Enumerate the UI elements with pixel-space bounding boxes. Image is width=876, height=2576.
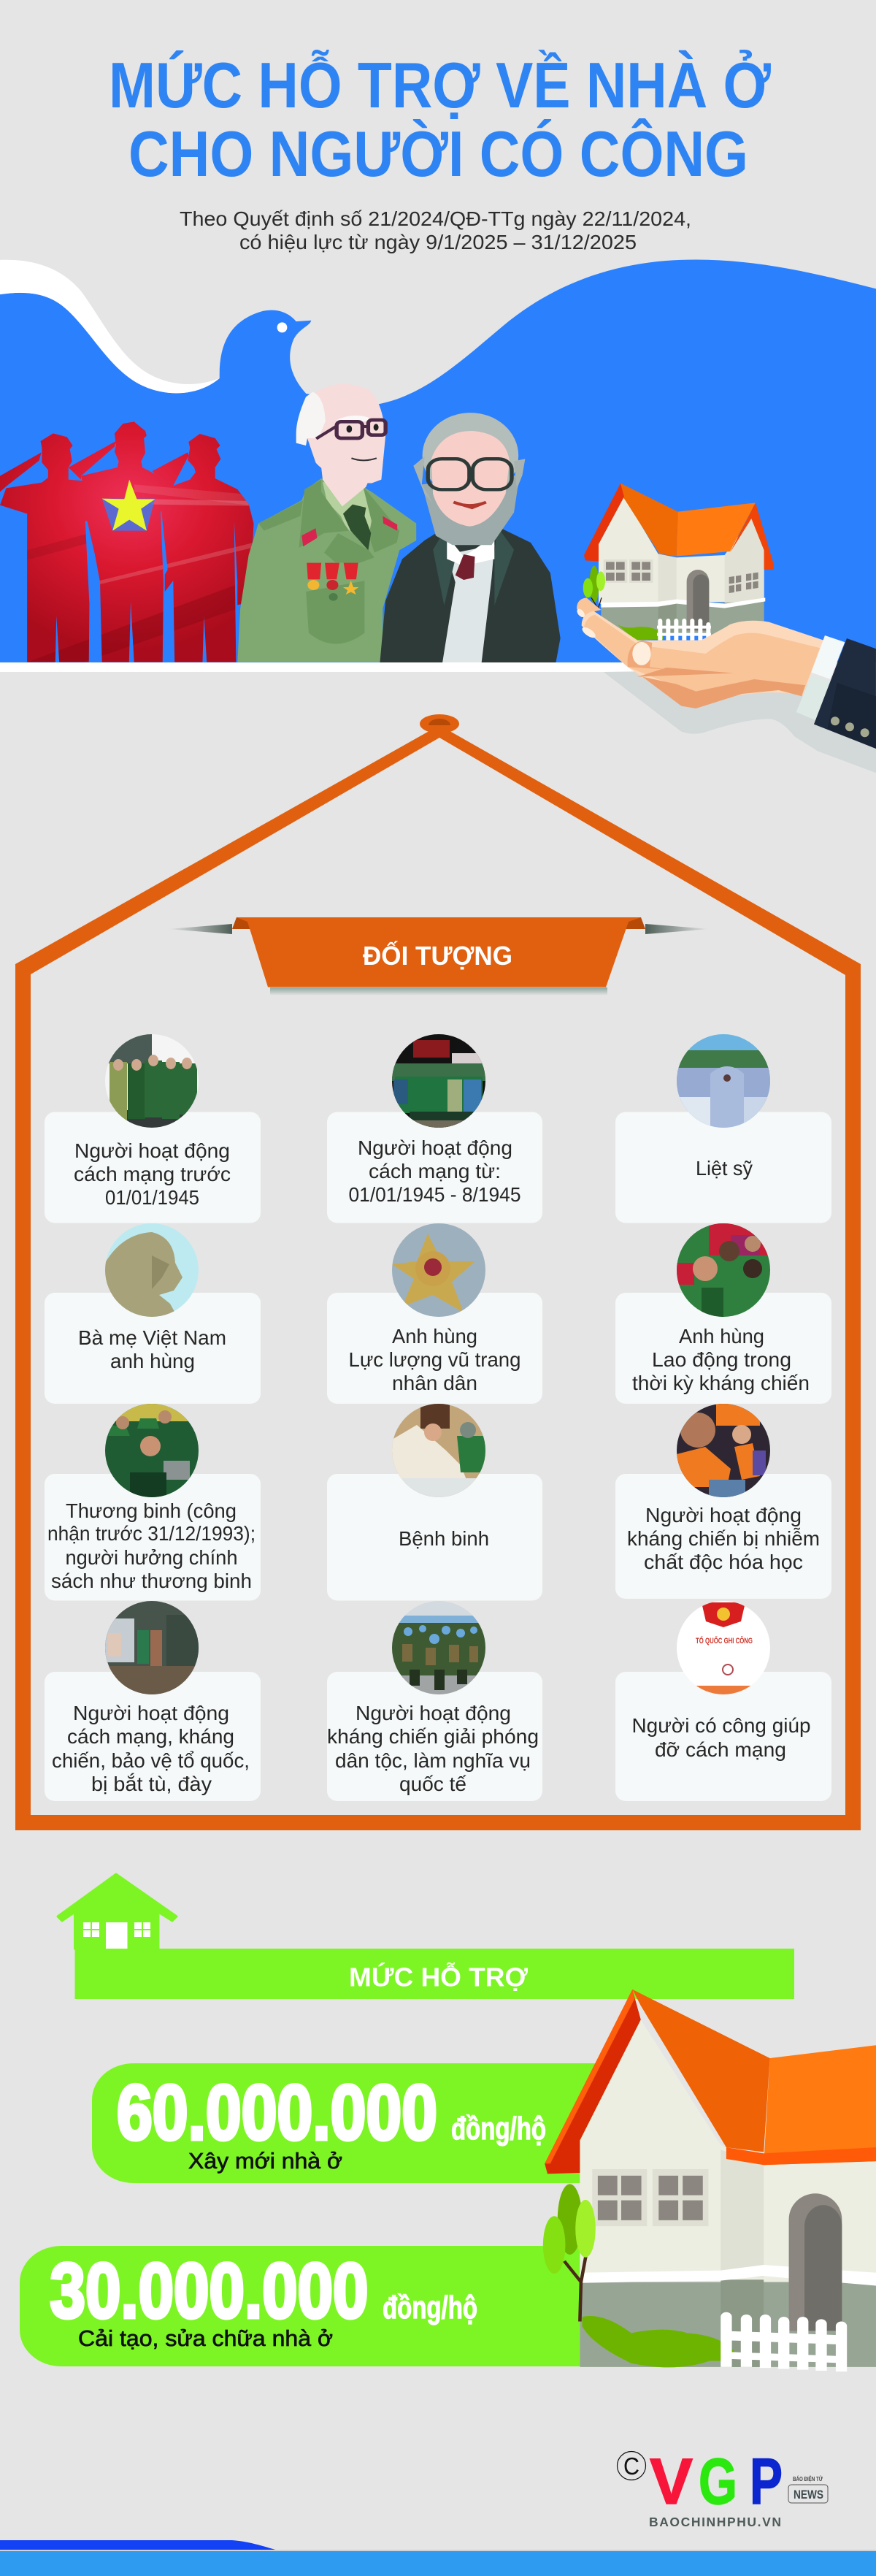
amount pill: 30 million bbox=[20, 2246, 606, 2366]
card: thuong binh: sách như thương binh bbox=[51, 1570, 252, 1592]
card: ba me viet nam anh hung bbox=[45, 1223, 261, 1404]
card: nguoi hoat dong 1945: Người hoạt động bbox=[358, 1136, 512, 1159]
card: giai phong dan toc nghia vu quoc te: dân tộc, làm nghĩa vụ bbox=[335, 1749, 531, 1772]
logo: VGP News: BÁO ĐIỆN TỬ bbox=[793, 2476, 823, 2483]
amount pill: 60 million bbox=[92, 2063, 606, 2183]
logo: VGP News: BAOCHINHPHU.VN bbox=[649, 2515, 781, 2529]
photo: labour heroes bbox=[677, 1223, 770, 1317]
card: nguoi co cong giup do cach mang bbox=[615, 1601, 831, 1801]
white ground strip bbox=[0, 662, 657, 672]
logo: VGP News bbox=[618, 2445, 828, 2529]
card: bi bat tu day: bị bắt tù, đày bbox=[91, 1773, 212, 1795]
card: anh hung lao dong bbox=[615, 1223, 831, 1404]
photo: prison scene bbox=[105, 1601, 199, 1694]
amount pill: 30 million: Cải tạo, sửa chữa nhà ở bbox=[78, 2325, 333, 2351]
card: liet sy bbox=[615, 1034, 831, 1223]
photo: congress group bbox=[392, 1034, 485, 1129]
heading banner: doi tuong: ĐỐI TƯỢNG bbox=[363, 940, 512, 971]
photo: to quoc ghi cong certificate bbox=[677, 1601, 770, 1694]
photo: mother statue bbox=[105, 1223, 199, 1317]
card: thuong binh: Thương binh (công bbox=[66, 1499, 237, 1522]
hand holding house bbox=[575, 597, 876, 749]
card: benh binh bbox=[327, 1404, 542, 1601]
copyright mark bbox=[618, 2451, 645, 2480]
photo: medical check bbox=[392, 1404, 485, 1499]
photo: to quoc ghi cong certificate: TỔ QUỐC GHI CÔNG bbox=[696, 1635, 753, 1646]
hand shadow bbox=[604, 670, 876, 773]
card: nguoi hoat dong 1945: 01/01/1945 - 8/1945 bbox=[349, 1183, 521, 1206]
card: thuong binh bbox=[45, 1404, 261, 1601]
heading banner: doi tuong bbox=[168, 917, 710, 995]
card: nguoi hoat dong 1945: cách mạng từ: bbox=[369, 1160, 501, 1182]
card: giai phong dan toc nghia vu quoc te bbox=[327, 1601, 542, 1801]
photo: peacekeepers bbox=[392, 1601, 485, 1696]
logo: VGP News: V bbox=[650, 2445, 693, 2518]
photo: veterans group bbox=[105, 1034, 199, 1129]
card: nguoi hoat dong truoc 1945 bbox=[45, 1034, 261, 1223]
card: chat doc hoa hoc: Người hoạt động bbox=[645, 1504, 802, 1526]
card: chat doc hoa hoc bbox=[615, 1404, 831, 1599]
card: liet sy: Liệt sỹ bbox=[696, 1157, 753, 1180]
heading bar: muc ho tro: MỨC HỖ TRỢ bbox=[349, 1962, 528, 1992]
orange house frame bbox=[15, 725, 861, 1830]
photo: wounded veterans bbox=[105, 1404, 199, 1497]
saluting soldiers silhouette with flag bbox=[0, 414, 257, 665]
card: giai phong dan toc nghia vu quoc te: quốc tế bbox=[399, 1773, 466, 1795]
heading bar: muc ho tro bbox=[74, 1949, 794, 1999]
house on hand bbox=[583, 484, 774, 641]
card: nguoi hoat dong truoc 1945: Người hoạt động bbox=[74, 1139, 230, 1162]
photo: hero star bbox=[392, 1223, 485, 1317]
large house illustration bbox=[543, 1990, 876, 2371]
amount pill: 60 million: đồng/hộ bbox=[451, 2111, 546, 2147]
card: anh hung luc luong vu trang: Lực lượng vũ trang bbox=[349, 1348, 521, 1371]
card: benh binh: Bệnh binh bbox=[399, 1527, 489, 1550]
subtitle: Theo Quyết định số 21/2024/QĐ-TTg ngày 22/11/2024, bbox=[180, 207, 691, 230]
card: giai phong dan toc nghia vu quoc te: kháng chiến giải phóng bbox=[327, 1725, 539, 1748]
copyright mark: C bbox=[623, 2453, 639, 2480]
card: nguoi co cong giup do cach mang: Người có công giúp bbox=[632, 1714, 810, 1737]
amount pill: 60 million: 60.000.000 bbox=[117, 2068, 437, 2156]
card: nguoi co cong giup do cach mang: đỡ cách mạng bbox=[655, 1738, 786, 1761]
card: anh hung lao dong: Lao động trong bbox=[652, 1348, 791, 1371]
card: bi bat tu day: Người hoạt động bbox=[73, 1702, 229, 1724]
amount pill: 30 million: đồng/hộ bbox=[383, 2290, 477, 2325]
card: bi bat tu day: cách mạng, kháng bbox=[67, 1725, 234, 1748]
card: ba me viet nam anh hung: anh hùng bbox=[110, 1350, 195, 1372]
veteran man bbox=[237, 384, 416, 662]
title: MỨC HỖ TRỢ VỀ NHÀ Ở bbox=[109, 49, 771, 121]
subtitle bbox=[180, 207, 691, 253]
card: giai phong dan toc nghia vu quoc te: Người hoạt động bbox=[356, 1702, 511, 1724]
card: nguoi hoat dong 1945 bbox=[327, 1034, 542, 1223]
elderly woman bbox=[380, 413, 561, 662]
small green house icon bbox=[58, 1874, 177, 1949]
card: chat doc hoa hoc: chất độc hóa học bbox=[644, 1551, 803, 1573]
photo: cemetery bbox=[677, 1034, 770, 1128]
card: anh hung lao dong: thời kỳ kháng chiến bbox=[632, 1372, 810, 1394]
card: thuong binh: nhận trước 31/12/1993); bbox=[47, 1522, 256, 1545]
logo: VGP News: G bbox=[699, 2445, 737, 2518]
card: chat doc hoa hoc: kháng chiến bị nhiễm bbox=[627, 1527, 820, 1550]
amount pill: 30 million: 30.000.000 bbox=[50, 2247, 368, 2334]
card: anh hung luc luong vu trang: Anh hùng bbox=[392, 1325, 477, 1348]
bottom wave bar bbox=[0, 2540, 876, 2576]
roof knob bbox=[420, 714, 459, 733]
amount pill: 60 million: Xây mới nhà ở bbox=[188, 2148, 342, 2174]
card: anh hung luc luong vu trang bbox=[327, 1223, 542, 1404]
title: CHO NGƯỜI CÓ CÔNG bbox=[128, 118, 748, 190]
photo: agent orange victims bbox=[677, 1404, 770, 1497]
blue wave with dove bbox=[0, 260, 876, 662]
logo: VGP News: P bbox=[750, 2445, 783, 2518]
card: thuong binh: người hưởng chính bbox=[66, 1546, 238, 1569]
card: bi bat tu day: chiến, bảo vệ tổ quốc, bbox=[52, 1749, 250, 1772]
card: bi bat tu day bbox=[45, 1601, 261, 1801]
card: nguoi hoat dong truoc 1945: 01/01/1945 bbox=[105, 1186, 199, 1209]
card: anh hung luc luong vu trang: nhân dân bbox=[392, 1372, 477, 1394]
subtitle: có hiệu lực từ ngày 9/1/2025 – 31/12/2025 bbox=[239, 231, 637, 253]
card: ba me viet nam anh hung: Bà mẹ Việt Nam bbox=[78, 1326, 226, 1349]
card: nguoi hoat dong truoc 1945: cách mạng trước bbox=[74, 1163, 231, 1185]
card: anh hung lao dong: Anh hùng bbox=[679, 1325, 764, 1348]
title bbox=[109, 49, 771, 190]
logo: VGP News: NEWS bbox=[794, 2488, 823, 2502]
